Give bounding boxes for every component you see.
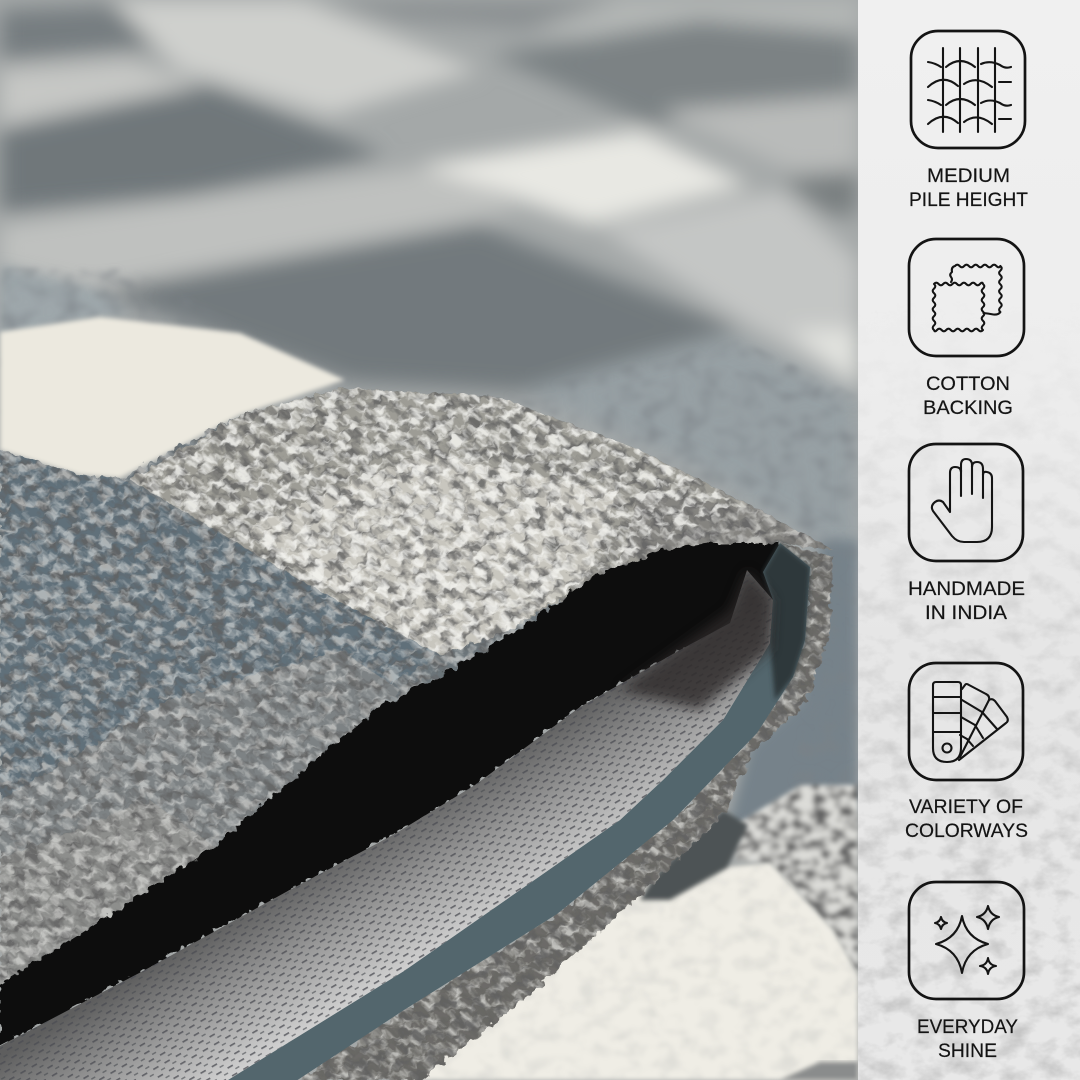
feature: cotton backing (909, 239, 1024, 419)
feature: medium pile height (909, 31, 1028, 211)
feature: handmade in India (908, 444, 1025, 624)
panel: feature sidebar (858, 0, 1080, 1080)
label: handmade in India: IN INDIA (925, 602, 1007, 624)
foreground patchy check (736, 782, 858, 970)
shadow under roll (640, 810, 748, 900)
label: handmade in India (908, 578, 1025, 624)
label: everyday shine: EVERYDAY (917, 1016, 1018, 1038)
rug edge binding (228, 543, 810, 1080)
foreground cream rug (400, 850, 860, 1080)
icon: sparkles (909, 882, 1024, 999)
photo: rolled rug close-up (0, 0, 860, 1080)
rug underside: cotton backing (0, 570, 773, 1080)
label: medium pile height: MEDIUM (927, 165, 1010, 187)
backing shadow near fold (620, 570, 773, 710)
background: blurred checked rug (0, 0, 858, 570)
background: lower right rug edge (0, 265, 858, 835)
label: variety of colorways: COLORWAYS (905, 820, 1028, 842)
light yarn highlights on checked area (130, 387, 741, 654)
label: variety of colorways: VARIETY OF (909, 796, 1023, 818)
icon: fabric swatches (909, 239, 1024, 356)
cream check (0, 317, 345, 478)
background: yarn grain (1, 268, 856, 531)
icon: woven pile (911, 31, 1025, 148)
rug edge shadow (763, 543, 810, 700)
label: medium pile height: PILE HEIGHT (909, 189, 1028, 211)
label: everyday shine: SHINE (938, 1040, 997, 1062)
label: medium pile height (909, 165, 1028, 211)
label: cotton backing: COTTON (926, 373, 1010, 395)
rolled rug (0, 380, 860, 1080)
rug outer grey band (290, 540, 840, 1080)
label: handmade in India: HANDMADE (908, 578, 1025, 600)
rug underside: dark hollow (0, 543, 780, 1046)
feature: everyday shine (909, 882, 1024, 1062)
label: cotton backing (923, 373, 1013, 419)
icon: hand (909, 444, 1023, 561)
label: variety of colorways (905, 796, 1028, 842)
label: everyday shine (917, 1016, 1018, 1062)
rug top surface (0, 380, 860, 1000)
icon: colour fan deck (909, 663, 1023, 780)
label: cotton backing: BACKING (923, 397, 1013, 419)
feature: variety of colorways (905, 663, 1028, 842)
